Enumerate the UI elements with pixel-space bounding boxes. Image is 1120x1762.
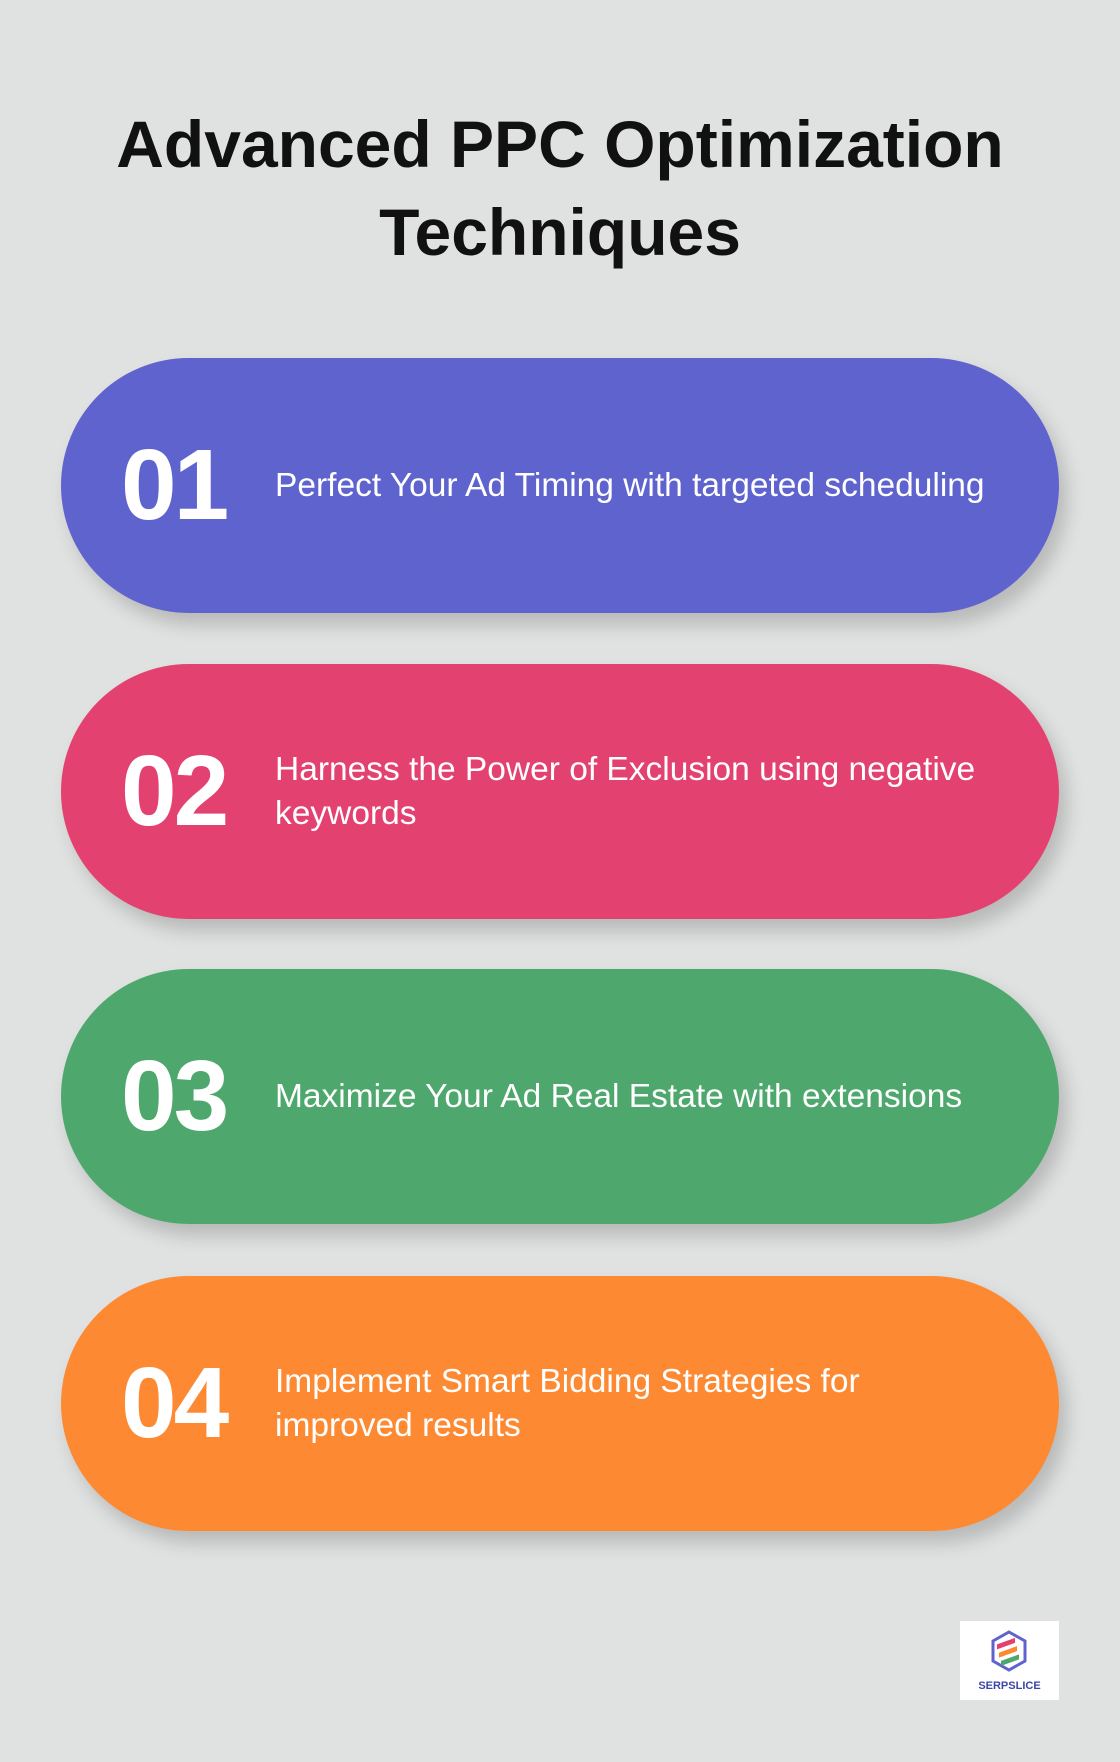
title: Techniques — [379, 195, 741, 269]
panel: 03 — [61, 969, 1059, 1224]
text 01: Perfect Your Ad Timing with targeted scheduling — [275, 466, 985, 504]
panel: 02 — [61, 664, 1059, 919]
text 04: improved results — [275, 1406, 521, 1444]
text 04 — [275, 1362, 860, 1444]
number 01: 01 — [121, 429, 226, 541]
logo: SERPSLICE — [978, 1680, 1041, 1692]
text 02: Harness the Power of Exclusion using negative keywords — [275, 750, 975, 832]
panel: 01 — [61, 358, 1059, 613]
panel: 04 — [61, 1276, 1059, 1531]
number 04: 04 — [121, 1347, 226, 1459]
title — [116, 107, 1004, 269]
number 02: 02 — [121, 735, 226, 847]
text 03: Maximize Your Ad Real Estate with extensions — [275, 1078, 962, 1114]
title: Advanced PPC Optimization — [116, 107, 1004, 181]
logo — [960, 1621, 1059, 1700]
number 03: 03 — [121, 1040, 226, 1152]
text 04: Implement Smart Bidding Strategies for — [275, 1362, 860, 1400]
